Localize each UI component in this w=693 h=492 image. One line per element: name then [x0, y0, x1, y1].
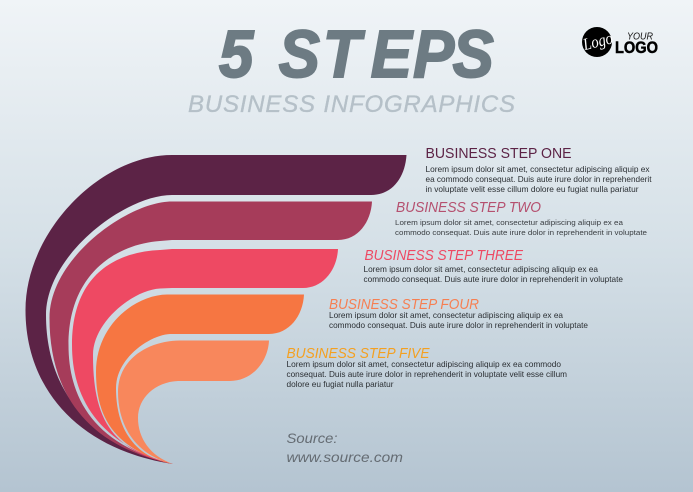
step five body: consequat. Duis aute irure dolor in reprehenderit in voluptate velit esse cillum [286, 369, 567, 379]
step five body: dolore eu fugiat nulla pariatur [286, 379, 394, 389]
step three body: Lorem ipsum dolor sit amet, consectetur adipiscing aliquip ex ea [364, 264, 598, 274]
subtitle: BUSINESS INFOGRAPHICS [188, 91, 515, 118]
step four body: commodo consequat. Duis aute irure dolor in reprehenderit in voluptate [329, 320, 588, 330]
title: 5 STEPS [219, 17, 494, 92]
step two body [395, 218, 647, 237]
logo badge [582, 27, 612, 57]
step four body [329, 310, 588, 330]
band 4 [96, 294, 304, 464]
step one heading: BUSINESS STEP ONE [426, 145, 572, 162]
source [286, 430, 403, 465]
step two body: commodo consequat. Duis aute irure dolor in reprehenderit in voluptate [395, 228, 647, 237]
step one body [426, 164, 652, 194]
step five text [286, 345, 567, 389]
step three text [364, 247, 623, 284]
step five body: Lorem ipsum dolor sit amet, consectetur adipiscing aliquip ex ea commodo [286, 359, 561, 369]
step four heading: BUSINESS STEP FOUR [329, 296, 479, 313]
step one text [426, 145, 652, 194]
step three body [364, 264, 623, 284]
step four text [329, 296, 588, 330]
step two text [395, 199, 647, 237]
logo word logo: LOGO [615, 39, 658, 57]
band 5 [118, 340, 269, 464]
band 3 [72, 249, 338, 464]
step one body: in voluptate velit esse cillum dolore eu fugiat nulla pariatur [426, 184, 639, 194]
band 1 [26, 155, 406, 464]
step three body: commodo consequat. Duis aute irure dolor in reprehenderit in voluptate [364, 274, 623, 284]
band 2 [50, 202, 372, 464]
step one body: ea commodo consequat. Duis aute irure dolor in reprehenderit [426, 174, 652, 184]
source: www.source.com [286, 449, 403, 465]
source: Source: [286, 430, 338, 446]
step four body: Lorem ipsum dolor sit amet, consectetur adipiscing aliquip ex ea [329, 310, 563, 320]
step two heading: BUSINESS STEP TWO [396, 199, 541, 216]
logo script: Logo [580, 28, 615, 54]
logo word your: YOUR [627, 30, 653, 42]
step five body [286, 359, 567, 389]
step one body: Lorem ipsum dolor sit amet, consectetur adipiscing aliquip ex [426, 164, 650, 174]
step five heading: BUSINESS STEP FIVE [286, 345, 430, 362]
step three heading: BUSINESS STEP THREE [364, 247, 524, 264]
step two body: Lorem ipsum dolor sit amet, consectetur adipiscing aliquip ex ea [395, 218, 624, 227]
logo [580, 27, 658, 57]
wing chart [26, 155, 406, 464]
